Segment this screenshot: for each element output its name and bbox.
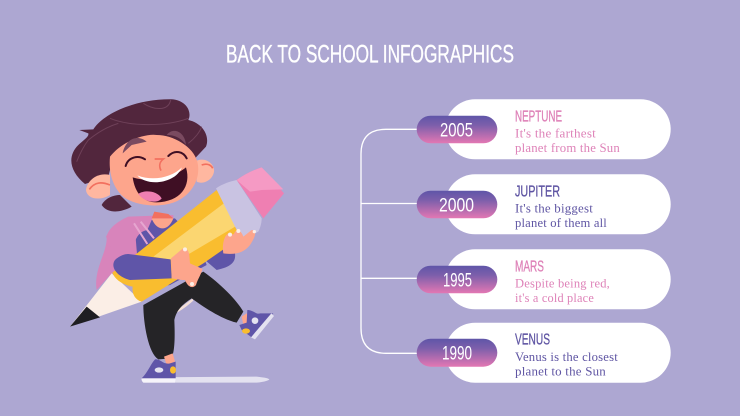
pencil eraser [237,167,284,218]
sweater torso and far arm [106,218,235,290]
description: It's the farthest [515,126,596,140]
description: planet from the Sun [515,141,621,155]
forelock [123,131,186,153]
pencil wood [70,273,142,327]
far hand [223,229,256,254]
year pill [417,116,497,143]
hair [71,99,207,184]
neck [152,218,173,228]
card [445,99,671,159]
title: BACK TO SCHOOL INFOGRAPHICS [226,40,514,68]
description: It's the biggest [515,202,593,216]
face [110,135,198,205]
front shoe [239,310,274,339]
item: Neptune 2005 [417,99,671,159]
year pill [417,266,497,293]
near arm [113,254,172,280]
item: Jupiter 2000 [417,174,671,234]
legs [143,272,243,359]
description: it's a cold place [515,291,594,305]
back hair tuft [102,195,132,211]
year: 1995 [443,270,472,292]
description: planet to the Sun [515,364,607,378]
item: Mars 1995 [417,249,671,309]
ears [86,160,214,199]
eyes [126,152,187,166]
description: planet of them all [515,216,607,230]
year: 2000 [439,196,474,216]
year pill [417,191,497,218]
name: MARS [515,258,544,276]
connector lines [361,129,417,353]
card [445,323,671,383]
ground shadow [143,377,269,383]
card [445,249,671,309]
year: 2005 [440,120,473,142]
name: NEPTUNE [515,108,562,126]
pencil ferrule [216,180,262,240]
year: 1990 [442,344,472,364]
near hand [171,247,203,287]
description: Despite being red, [515,276,610,290]
pencil [70,167,284,327]
year pill [417,339,497,367]
backpack hood [96,215,173,290]
name: VENUS [515,332,550,348]
mouth [133,167,187,202]
illustration: boy holding giant pencil [70,99,284,383]
nose [155,159,163,171]
pencil lead [70,307,100,327]
description: Venus is the closest [515,350,618,364]
name: JUPITER [515,184,560,200]
card [445,174,671,234]
pencil body [112,190,247,302]
item: Venus 1990 [417,323,671,383]
rear shoe [142,353,176,383]
